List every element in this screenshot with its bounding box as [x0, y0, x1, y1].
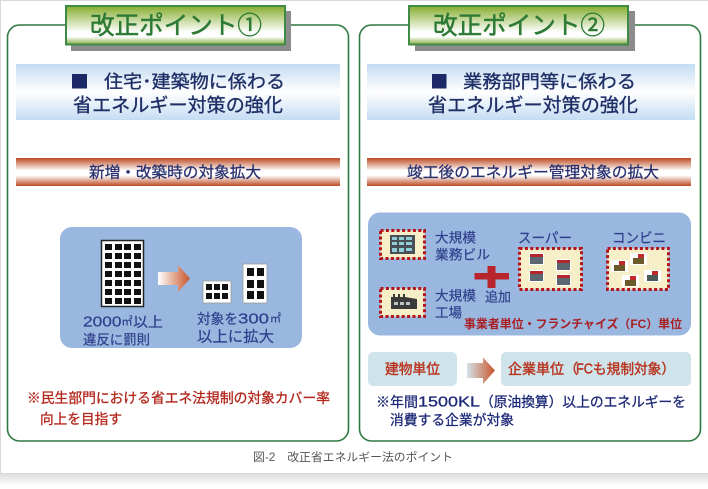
label: current threshold: 違反に罰則 [83, 332, 150, 348]
supermarket group [520, 248, 582, 290]
panel 1 note: 向上を目指す [40, 411, 122, 427]
panel 2 title badge [409, 6, 635, 51]
icon: office building [380, 230, 424, 258]
panel 1 red subheading [16, 158, 340, 186]
label: current threshold: ㎡ [122, 315, 132, 328]
label: expanded threshold: ㎡ [270, 312, 281, 325]
label: large factory: 大規模 [435, 288, 477, 304]
icon: plus [474, 266, 509, 288]
panel: point 2 [360, 6, 700, 441]
box: per building [368, 352, 457, 386]
arrow [467, 358, 495, 384]
caption: 図-2 改正省エネルギー法のポイント [253, 450, 453, 464]
panel 1 blue heading [16, 64, 340, 120]
panel: point 1 [8, 6, 348, 441]
box: per company: 企業単位（ [508, 361, 578, 377]
icon: large building [102, 240, 144, 306]
panel 2 blue heading [367, 64, 695, 120]
icon: small building [203, 281, 231, 303]
label: large office: 大規模 [435, 230, 477, 246]
box: per company: FC [576, 360, 593, 378]
panel 2 note: （原油換算）以上のエネルギーを [480, 394, 686, 410]
panel 2 diagram [368, 212, 691, 336]
panel 1 note [27, 390, 330, 427]
label: large factory: 工場 [435, 306, 462, 320]
panel 1 diagram [60, 227, 302, 348]
panel 2 blue heading: 業務部門等に係わる [463, 72, 636, 92]
panel 2 red subheading [367, 158, 691, 186]
panel 1 blue heading: 省エネルギー対策の強化 [73, 94, 283, 116]
label: convenience store: コンビニ [612, 230, 666, 246]
panel 2 note: 消費する企業が対象 [390, 412, 514, 428]
panel 1 outline [8, 25, 348, 441]
panel 2 blue heading: 省エネルギー対策の強化 [428, 94, 638, 116]
icon: factory [380, 288, 424, 316]
panel 2 outline [360, 25, 700, 441]
label: expanded threshold: 以上に拡大 [197, 328, 274, 346]
panel 2 note [376, 394, 686, 428]
panel 1 red subheading: 新増・改築時の対象拡大 [89, 164, 261, 182]
panel 2 red subheading: 竣工後のエネルギー管理対象の拡大 [407, 164, 659, 182]
panel 2 note: ※年間 [376, 394, 418, 410]
panel 2 title badge: 改正ポイント② [433, 12, 605, 40]
arrow [158, 265, 190, 292]
label: expanded threshold: 300 [238, 310, 269, 328]
label: per-business unit: 事業者単位・フランチャイズ（FC）単位 [464, 316, 682, 331]
box: per building: 建物単位 [385, 361, 440, 377]
panel 1 title badge: 改正ポイント① [90, 12, 262, 40]
convenience store group [608, 248, 668, 290]
label: current threshold: 以上 [133, 314, 163, 330]
panel 1 title badge [66, 6, 291, 51]
label: large office [435, 230, 490, 262]
label: expanded threshold [197, 310, 281, 346]
label: added: 追加 [485, 290, 511, 304]
icon: mid-size building [243, 264, 267, 303]
label: current threshold: 2000 [83, 314, 122, 330]
box: per company: も規制対象） [593, 361, 675, 377]
panel 1 note: ※民生部門における省エネ法規制の対象カバー率 [27, 390, 330, 406]
label: large office: 業務ビル [435, 248, 490, 262]
panel 2 note: 1500KL [418, 394, 480, 410]
label: supermarket: スーパー [518, 230, 572, 246]
panel 1 blue heading: 住宅･建築物に係わる [104, 72, 285, 92]
label: expanded threshold: 対象を [197, 311, 238, 327]
box: per company [501, 352, 691, 386]
label: large factory [435, 288, 477, 320]
label: current threshold [83, 314, 163, 348]
